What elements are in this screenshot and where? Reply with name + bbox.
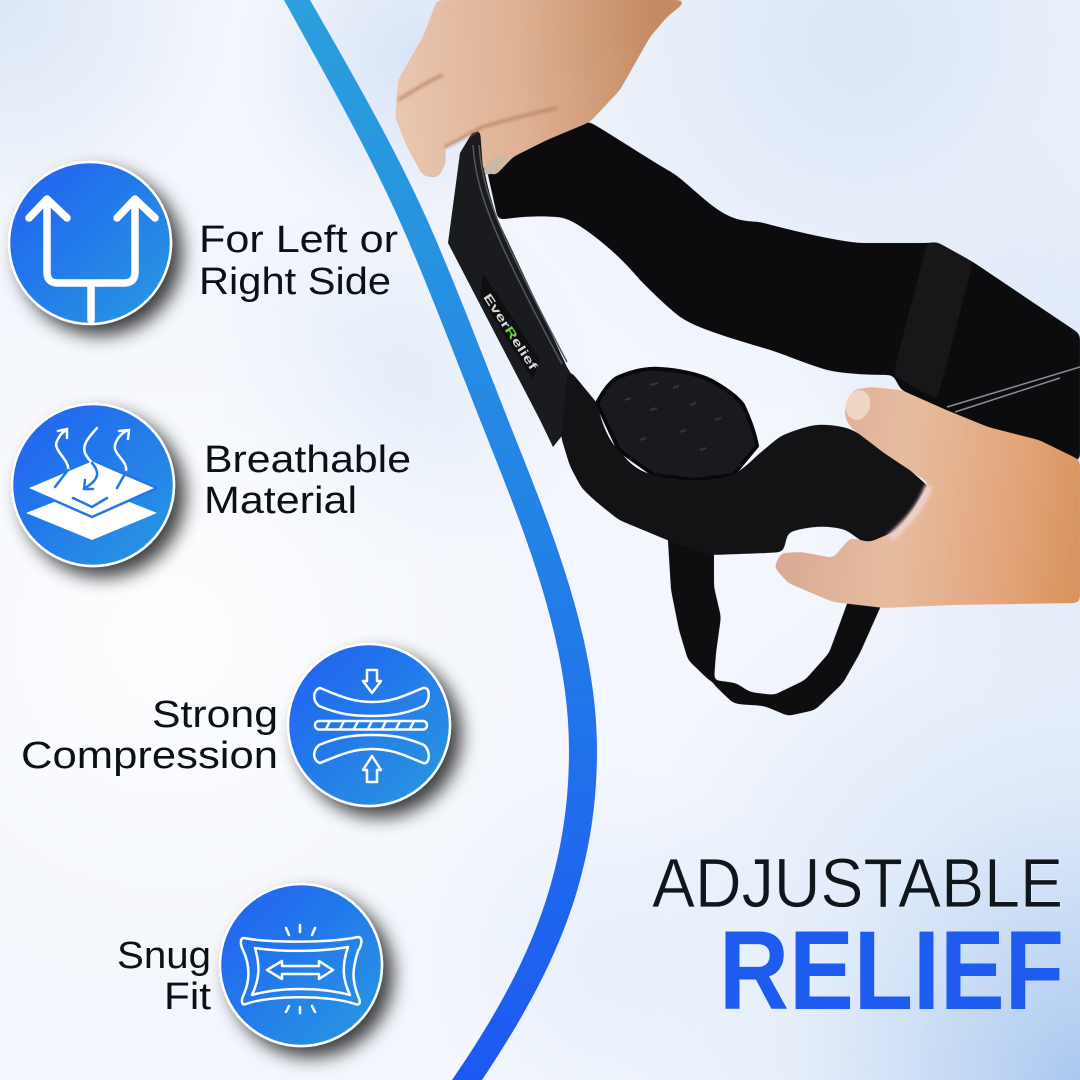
top hand — [395, 0, 688, 178]
lower loop strap — [667, 525, 888, 716]
icon: split arrows — [9, 162, 171, 324]
label: Breathable — [204, 439, 411, 481]
main waist strap — [478, 122, 1080, 462]
compression pad — [597, 369, 757, 480]
pad mesh specks — [625, 383, 721, 450]
label: Material — [204, 480, 357, 522]
pad holder — [561, 368, 929, 555]
icon: stretch pad — [220, 884, 382, 1046]
label: Compression — [21, 735, 278, 777]
icon: layers with airflow — [12, 404, 174, 566]
title — [652, 844, 1064, 1033]
curved blue band — [284, 0, 597, 1080]
thumbnail — [481, 152, 509, 178]
strap edge stitching — [947, 367, 1080, 412]
feature: snug fit — [117, 884, 382, 1046]
right thumbnail — [843, 387, 873, 423]
label: Fit — [164, 976, 211, 1018]
brand label — [480, 273, 541, 380]
icon: compression layers — [288, 644, 450, 806]
feature: breathable material — [12, 404, 411, 566]
label: Strong — [152, 694, 278, 736]
label: Snug — [117, 935, 211, 977]
velcro patch — [893, 242, 973, 400]
right hand — [774, 387, 1080, 608]
feature: left or right side — [9, 162, 398, 324]
top hand finger creases — [398, 75, 557, 147]
brand label: Ever Relief — [480, 291, 541, 374]
flap edge highlight — [473, 145, 567, 364]
right hand palm shading — [890, 486, 929, 538]
feature: strong compression — [21, 644, 450, 806]
left flap — [448, 130, 597, 447]
photo: hands holding brace — [395, 0, 1080, 716]
label: Right Side — [199, 261, 391, 303]
label: For Left or — [199, 219, 398, 261]
